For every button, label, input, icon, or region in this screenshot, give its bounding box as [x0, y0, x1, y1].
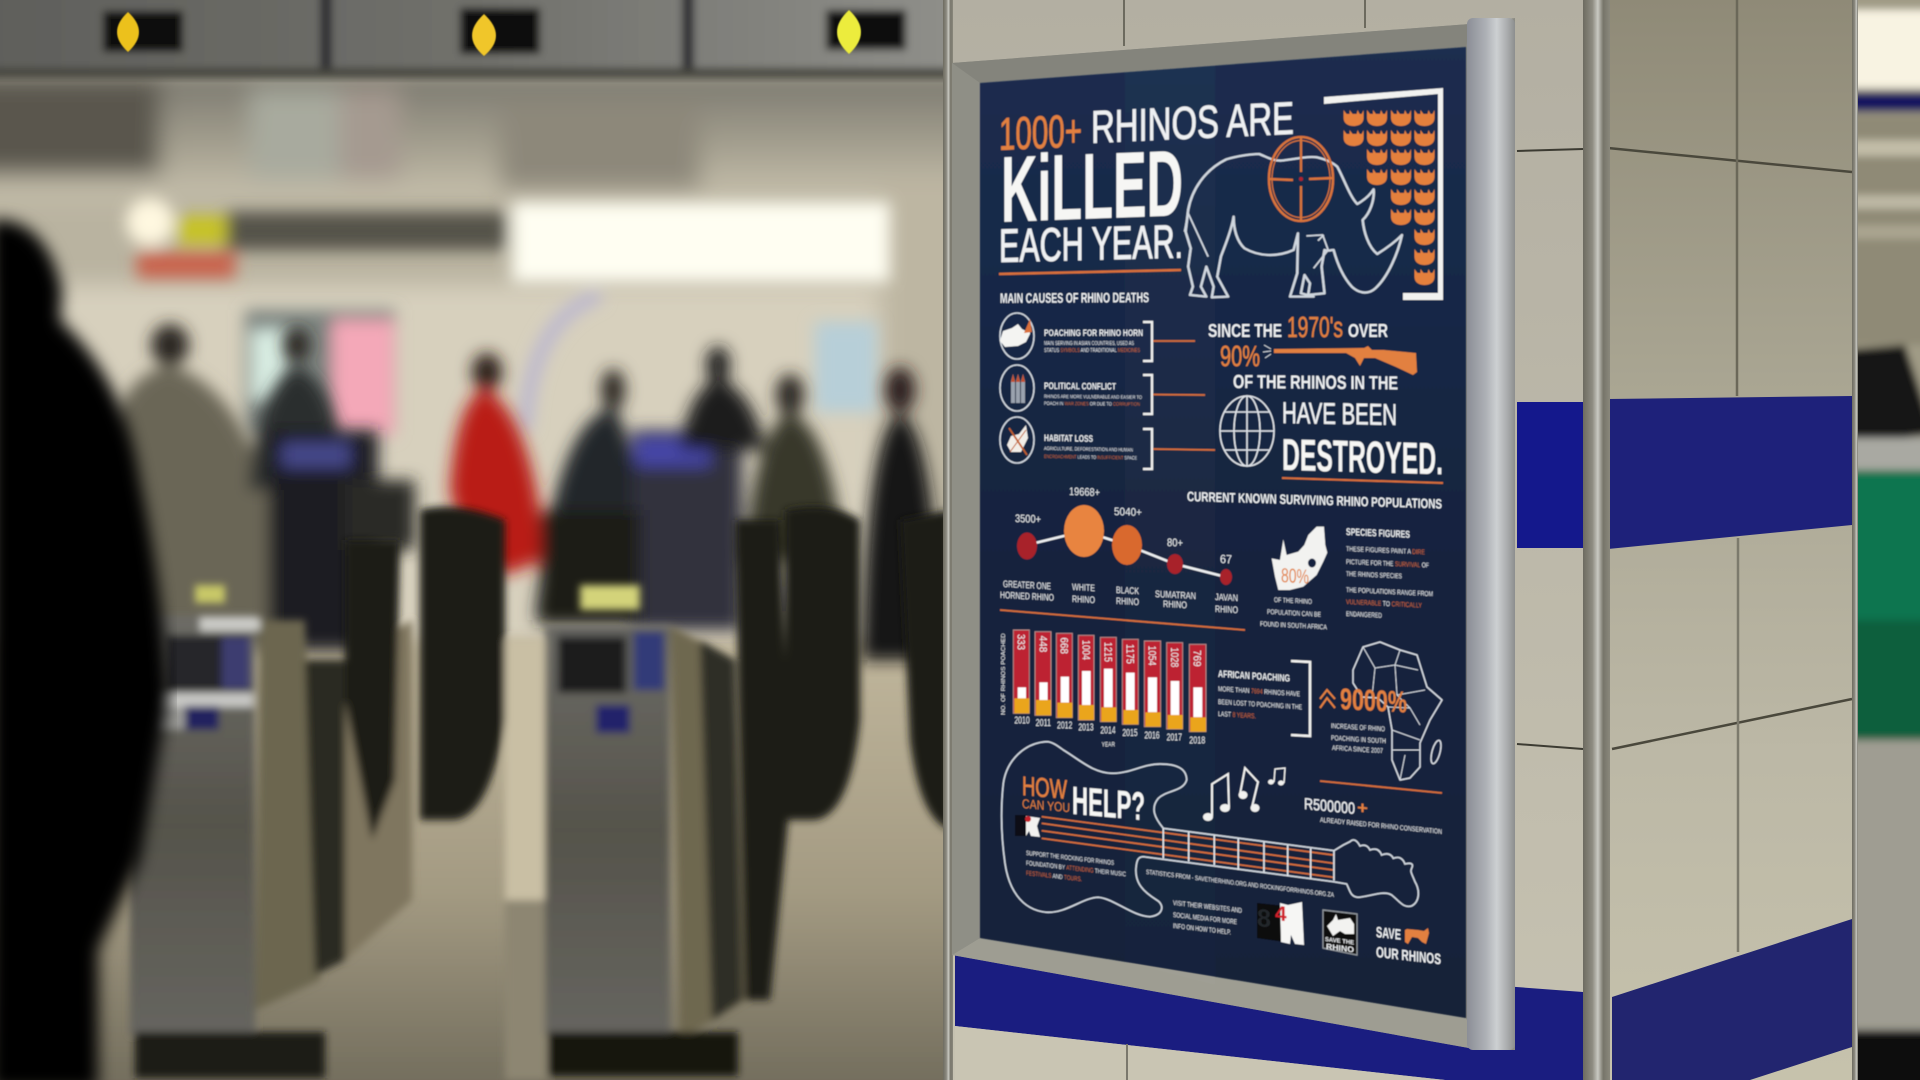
sign-off: save our rhinos: [1376, 924, 1441, 968]
statement: have been destroyed: DESTROYED.: [1282, 429, 1443, 484]
heading: how can you help: HELP?: [1072, 779, 1145, 829]
statement: since the 1970s: 1970's: [1287, 312, 1343, 344]
people and ticket machines: [100, 324, 940, 660]
bubble chart: rhino populations: 5040+: [1114, 506, 1142, 519]
ticket gates: [130, 507, 950, 1080]
bubble chart: rhino populations: 80+: [1167, 537, 1183, 550]
heading: main causes: MAIN CAUSES OF RHINO DEATHS: [1000, 289, 1149, 306]
poster panel: [980, 47, 1466, 1018]
poster frame: [952, 18, 1515, 1050]
logo: save the rhino: [1323, 910, 1357, 955]
bar 2016: 1054: [1144, 641, 1161, 741]
rhino icons grid: [1344, 110, 1434, 285]
bar chart: rhinos poached per year: [1001, 630, 1206, 749]
heading: how can you help: HOW: [1022, 771, 1067, 805]
text block: species figures: ENDANGERED: [1346, 611, 1382, 620]
stat: 9000% increase: [1320, 683, 1407, 755]
bar 2014: 1215: [1100, 637, 1116, 736]
target crosshair: [1269, 137, 1334, 221]
cause 1: poaching for rhino horn: MAIN SERVING IN ASIAN COUNTRIES, USED AS: [1044, 341, 1135, 347]
bar 2015: 1175: 2015: [1122, 728, 1138, 739]
cause 2: political conflict: RHINOS ARE MORE VULNERABLE AND EASIER TO: [1044, 394, 1142, 401]
stat: R500000+ raised: R500000: [1304, 795, 1355, 818]
cause 1: poaching for rhino horn: POACHING FOR RHINO HORN: [1044, 328, 1143, 339]
bubble chart: rhino populations: RHINO: [1163, 599, 1187, 611]
stat: 9000% increase: POACHING IN SOUTH: [1331, 735, 1386, 745]
bar 2017: 1028: 2017: [1167, 733, 1182, 744]
cause 1: poaching for rhino horn: [1000, 313, 1195, 361]
sign-off: save our rhinos: OUR RHINOS: [1376, 944, 1441, 968]
guitar frets: [1163, 828, 1334, 881]
text block: support rocking for rhinos: SUPPORT THE ROCKING FOR RHINOS: [1026, 850, 1114, 867]
text block: species figures: [1346, 527, 1433, 620]
stat: 9000% increase: 9000%: [1340, 683, 1407, 720]
bar 2015: 1175: 1175: [1124, 644, 1136, 664]
title: [999, 92, 1294, 272]
guitar outline illustration: [1002, 742, 1418, 917]
bubble chart: rhino populations: RHINO: [1072, 594, 1095, 606]
cause 2: political conflict: POLITICAL CONFLICT: [1044, 381, 1116, 393]
tally bracket of dead rhino icons: [1324, 88, 1443, 300]
text block: statistics source: STATISTICS FROM - SAVETHERHINO.ORG AND ROCKINGFORRHINOS.ORG.ZA: [1146, 869, 1334, 899]
logo: save the rhino: RHINO: [1326, 942, 1354, 954]
icon: rifle: [1263, 345, 1417, 375]
statement: of the rhinos in the: OF THE RHINOS IN THE: [1233, 372, 1398, 394]
bar 2012: 668: 2012: [1057, 720, 1073, 731]
stat: R500000+ raised: [1304, 795, 1442, 836]
bar 2012: 668: [1056, 633, 1073, 731]
statement: since the 1970s: [1208, 312, 1388, 373]
ceiling gate band with signals: [0, 0, 960, 78]
map: South Africa 80%: 80%: [1281, 565, 1309, 588]
stat: R500000+ raised: +: [1357, 798, 1368, 818]
background to the right of pillar with passer-by: [1858, 0, 1920, 1080]
text block: African poaching: BEEN LOST TO POACHING IN THE: [1218, 699, 1302, 711]
map: South Africa 80%: [1260, 527, 1327, 632]
cause 3: habitat loss: ENCROACHMENT LEADS TO INSUFFICIENT SPACE: [1044, 454, 1138, 462]
stat: 9000% increase: AFRICA SINCE 2007: [1332, 745, 1383, 755]
title: EACH YEAR.: [999, 215, 1183, 272]
bar 2013: 1004: 2013: [1078, 723, 1094, 734]
cause 1: poaching for rhino horn: STATUS SYMBOLS AND TRADITIONAL MEDICINES: [1044, 348, 1141, 354]
bubble chart: rhino populations: SUMATRAN: [1155, 589, 1196, 602]
text block: African poaching: LAST 8 YEARS.: [1218, 711, 1256, 720]
background: blurred station concourse: [0, 0, 980, 1080]
title: KiLLED: [1001, 130, 1183, 242]
rhino outline illustration: [1185, 154, 1402, 297]
bar 2011: 448: [1035, 632, 1051, 729]
text block: African poaching: MORE THAN 7694 RHINOS HAVE: [1218, 686, 1300, 698]
cause 3: habitat loss: AGRICULTURE, DEFORESTATION AND HUMAN: [1044, 446, 1133, 454]
text block: support rocking for rhinos: FESTIVALS AND TOURS.: [1026, 870, 1082, 883]
bar 2011: 448: 448: [1036, 636, 1048, 652]
signal lamps: [117, 10, 861, 56]
icon: globe: [1220, 396, 1274, 466]
text block: species figures: PICTURE FOR THE SURVIVAL OF: [1346, 559, 1429, 570]
cause 3: habitat loss: [1000, 417, 1215, 469]
small logo on guitar: [1015, 815, 1040, 837]
text block: species figures: SPECIES FIGURES: [1346, 527, 1410, 541]
text block: visit their websites: [1173, 900, 1242, 937]
sign-off: save our rhinos: SAVE: [1376, 924, 1401, 944]
bubble chart: rhino populations: WHITE: [1072, 582, 1095, 594]
text block: visit their websites: VISIT THEIR WEBSITES AND: [1173, 900, 1242, 915]
heading: how can you help: CAN YOU: [1022, 796, 1070, 815]
icon: music notes: [1203, 768, 1285, 821]
bar 2016: 1054: 1054: [1146, 646, 1158, 666]
text block: African poaching: AFRICAN POACHING: [1218, 669, 1290, 685]
x axis label: YEAR: [1102, 743, 1116, 749]
bubble chart: rhino populations: RHINO: [1116, 596, 1139, 608]
statement: since the 1970s: 90%: [1220, 341, 1260, 373]
bubble chart: rhino populations: BLACK: [1116, 585, 1139, 597]
guitar strings: [1042, 817, 1333, 877]
statement: since the 1970s: OVER: [1348, 321, 1388, 341]
bar 2010: 333: [1013, 630, 1030, 726]
stat: R500000+ raised: ALREADY RAISED FOR RHINO CONSERVATION: [1320, 817, 1442, 836]
heading: surviving populations: CURRENT KNOWN SURVIVING RHINO POPULATIONS: [1187, 489, 1442, 512]
bubble chart: rhino populations: RHINO: [1215, 604, 1238, 616]
tiled wall around poster: [943, 0, 1585, 1080]
text block: visit their websites: SOCIAL MEDIA FOR MORE: [1173, 912, 1237, 926]
map: South Africa 80%: POPULATION CAN BE: [1267, 609, 1321, 619]
cause 2: political conflict: [1000, 365, 1205, 414]
bar 2018: 769: 2018: [1189, 735, 1206, 746]
bubble chart: rhino populations: 19668+: [1069, 486, 1100, 499]
y axis label: NO. OF RHINOS POACHED: [1001, 633, 1007, 715]
text block: support rocking for rhinos: [1026, 850, 1126, 883]
heading: how can you help: [1022, 771, 1145, 829]
map: South Africa 80%: OF THE RHINO: [1274, 597, 1312, 606]
bar 2011: 448: 2011: [1036, 718, 1051, 729]
statement: have been destroyed: [1282, 397, 1443, 484]
bar 2010: 333: 2010: [1014, 715, 1030, 726]
foreground dark figure: [0, 220, 168, 1080]
logo: save the rhino: SAVE THE: [1325, 937, 1354, 947]
text block: African poaching: [1218, 669, 1302, 720]
bar 2014: 1215: 2014: [1100, 725, 1116, 736]
bracket around African poaching: [1291, 661, 1310, 736]
bar 2010: 333: 333: [1015, 634, 1027, 650]
bar 2018: 769: [1189, 644, 1206, 746]
text block: visit their websites: INFO ON HOW TO HELP.: [1173, 923, 1231, 937]
statement: since the 1970s: SINCE THE: [1208, 321, 1282, 341]
logo: rocking for rhinos: 8: [1257, 904, 1271, 933]
bubble chart: rhino populations: HORNED RHINO: [1000, 590, 1054, 604]
bubble chart: rhino populations: 3500+: [1015, 513, 1041, 526]
bar 2016: 1054: 2016: [1144, 730, 1160, 741]
logo: rocking for rhinos: 4: [1275, 902, 1287, 926]
bar 2017: 1028: 1028: [1168, 647, 1180, 667]
bubble chart: rhino populations: JAVAN: [1215, 592, 1238, 604]
text block: species figures: THE POPULATIONS RANGE FROM: [1346, 587, 1433, 598]
bar 2012: 668: 668: [1058, 637, 1070, 654]
statement: have been destroyed: HAVE BEEN: [1282, 397, 1397, 432]
text block: species figures: THE RHINOS SPECIES: [1346, 571, 1402, 580]
stat: 9000% increase: INCREASE OF RHINO: [1331, 723, 1385, 733]
map: South Africa 80%: FOUND IN SOUTH AFRICA: [1260, 621, 1327, 632]
logo: rocking for rhinos: [1257, 902, 1304, 945]
corner pillar with tiles and blue bands: [1583, 0, 1860, 1080]
bubble chart: rhino populations: 67: [1220, 552, 1232, 566]
bar 2017: 1028: [1167, 643, 1183, 744]
bubble chart: rhino populations: GREATER ONE: [1003, 579, 1051, 593]
bar 2013: 1004: 1004: [1080, 640, 1092, 660]
title: RHINOS ARE: [1091, 92, 1294, 153]
map: Africa outline: [1353, 642, 1443, 780]
title: 1000+: [999, 104, 1082, 160]
text block: species figures: VULNERABLE TO CRITICALLY: [1346, 599, 1422, 610]
bar 2015: 1175: [1122, 639, 1138, 739]
cause 3: habitat loss: HABITAT LOSS: [1044, 433, 1093, 445]
cause 2: political conflict: POACH IN WAR ZONES OR DUE TO CORRUPTION: [1044, 401, 1140, 408]
bubble chart: rhino populations: [1000, 486, 1238, 616]
text block: support rocking for rhinos: FOUNDATION BY ATTENDING THEIR MUSIC: [1026, 860, 1126, 878]
bar 2014: 1215: 1215: [1102, 642, 1114, 662]
text block: species figures: THESE FIGURES PAINT A DIRE: [1346, 546, 1425, 556]
bar 2018: 769: 769: [1191, 650, 1203, 667]
bar 2013: 1004: [1078, 635, 1094, 734]
